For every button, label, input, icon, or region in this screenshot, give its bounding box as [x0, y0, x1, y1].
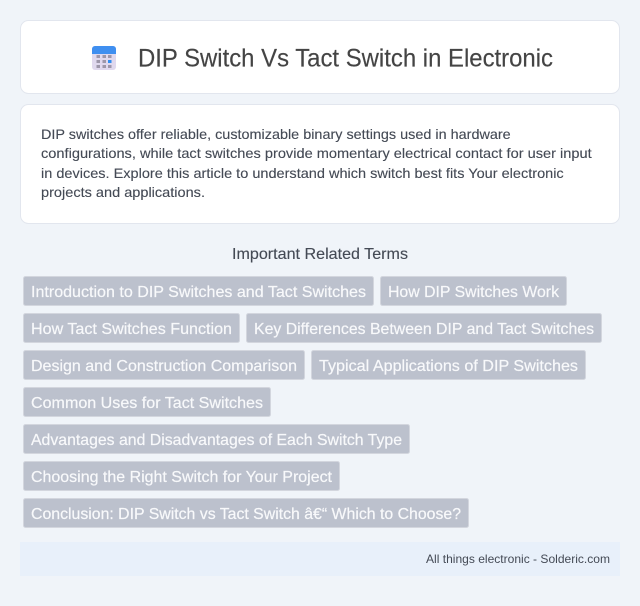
tag: introduction — [24, 276, 374, 306]
footer credit: All things electronic - Solderic.com — [426, 552, 610, 566]
tag: common uses — [24, 388, 270, 416]
intro paragraph: DIP switches offer reliable, customizable binary settings used in hardware — [41, 126, 511, 142]
panel: introduction — [20, 104, 620, 224]
tag: how DIP switches work: How DIP Switches Work — [388, 284, 560, 301]
tag: design and construction: Design and Construction Comparison — [31, 358, 297, 375]
intro paragraph: projects and applications. — [41, 184, 205, 200]
tag: choosing the right switch: Choosing the Right Switch for Your Project — [31, 469, 333, 486]
tag: introduction: Introduction to DIP Switches and Tact Switches — [31, 284, 366, 301]
tag: how tact switches function: How Tact Switches Function — [31, 321, 232, 338]
intro paragraph: in devices. Explore this article to understand which switch best fits Your electronic — [41, 165, 564, 181]
tag: conclusion: Conclusion: DIP Switch vs Tact Switch â€“ Which to Choose? — [31, 506, 461, 523]
tag: conclusion — [24, 498, 468, 528]
intro paragraph: configurations, while tact switches provide momentary electrical contact for user input — [41, 145, 592, 161]
tag: typical applications: Typical Applications of DIP Switches — [319, 358, 578, 375]
title: DIP Switch Vs Tact Switch in Electronic — [138, 44, 553, 72]
tag: choosing the right switch — [24, 462, 340, 490]
icon: calendar — [92, 46, 116, 70]
tag: design and construction — [24, 350, 304, 380]
tag: advantages and disadvantages: Advantages and Disadvantages of Each Switch Type — [31, 432, 402, 449]
related terms tags — [24, 276, 602, 528]
tag: key differences — [246, 314, 602, 342]
tag: typical applications — [312, 350, 586, 380]
intro paragraph — [41, 126, 592, 200]
footer bar — [20, 542, 620, 576]
panel: title header — [20, 20, 620, 94]
tag: how tact switches function — [24, 314, 240, 342]
tag: how DIP switches work — [380, 276, 566, 306]
tag: common uses: Common Uses for Tact Switches — [31, 395, 263, 412]
tag: advantages and disadvantages — [24, 424, 410, 454]
heading: important related terms: Important Related Terms — [232, 246, 408, 263]
tag: key differences: Key Differences Between DIP and Tact Switches — [254, 321, 594, 338]
